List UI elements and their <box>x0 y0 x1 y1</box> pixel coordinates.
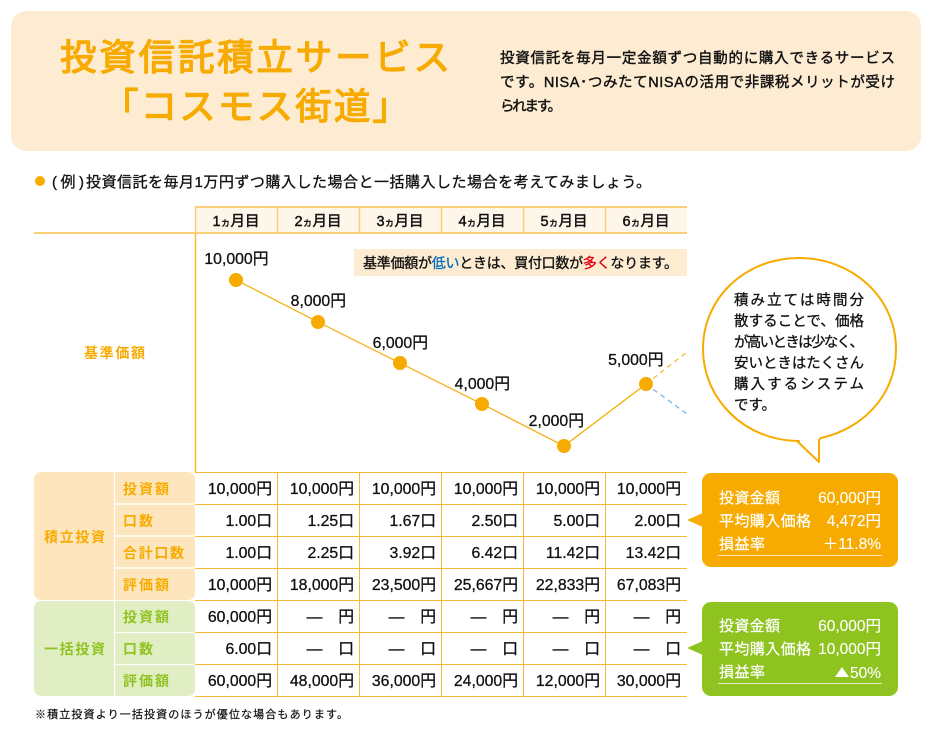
example heading: (例) <box>52 174 84 191</box>
table values: lump sum: ― 口 <box>634 641 681 658</box>
table header months: 3ヵ月目 <box>376 214 424 230</box>
table values: lump sum: ― 円 <box>634 609 681 626</box>
table values: tsumitate: 10,000円 <box>208 577 272 594</box>
note: low price buys more units: 基準価額が低いときは、買付口数が多くなります。 <box>363 255 678 271</box>
summary box: lump sum: 損益率 <box>719 664 765 681</box>
table values: lump sum <box>208 609 681 690</box>
table values: lump sum: ― 口 <box>307 641 354 658</box>
line chart: base price: 8,000円 <box>291 293 346 310</box>
table values: lump sum: 48,000円 <box>290 673 354 690</box>
table row labels: lump sum: 評価額 <box>123 673 169 689</box>
summary box: lump sum <box>687 602 898 696</box>
table values: lump sum: ― 口 <box>389 641 436 658</box>
table row labels: tsumitate <box>34 472 195 600</box>
row label: base price: 基準価額 <box>84 345 145 361</box>
description text: られます。 <box>500 98 562 115</box>
table row labels: tsumitate: 投資額 <box>123 481 169 497</box>
table values: tsumitate: 13.42口 <box>626 545 681 562</box>
table header months: 1ヵ月目 <box>212 214 260 230</box>
summary box: tsumitate <box>687 473 898 567</box>
table values: lump sum: 24,000円 <box>454 673 518 690</box>
table header months: 5ヵ月目 <box>540 214 588 230</box>
table header months: 4ヵ月目 <box>458 214 506 230</box>
table values: lump sum: 12,000円 <box>536 673 600 690</box>
table grid <box>195 472 687 697</box>
table values: lump sum: 36,000円 <box>372 673 436 690</box>
summary box: tsumitate: 投資金額 <box>719 490 780 507</box>
table row labels: lump sum <box>34 601 195 696</box>
table row labels: tsumitate: 積立投資 <box>44 529 105 545</box>
table row labels: tsumitate: 合計口数 <box>123 545 184 561</box>
title <box>60 37 450 127</box>
header panel <box>11 11 921 151</box>
summary box: tsumitate: 平均購入価格 <box>719 513 811 530</box>
table values: tsumitate: 18,000円 <box>290 577 354 594</box>
table row labels: lump sum: 一括投資 <box>44 641 105 657</box>
line chart: base price: 4,000円 <box>455 376 510 393</box>
table values: tsumitate: 1.00口 <box>225 513 272 530</box>
summary box: lump sum: 10,000円 <box>818 641 881 658</box>
line chart: base price: 5,000円 <box>608 352 664 369</box>
description text: 投資信託を毎月一定金額ずつ自動的に購入できるサービス <box>500 50 895 67</box>
table values: tsumitate: 10,000円 <box>536 481 600 498</box>
summary box: lump sum: 投資金額 <box>719 618 780 635</box>
table values: lump sum: 60,000円 <box>208 609 272 626</box>
table values: tsumitate: 2.00口 <box>634 513 681 530</box>
summary box: tsumitate: 60,000円 <box>818 490 881 507</box>
table values: tsumitate: 22,833円 <box>536 577 600 594</box>
table values: tsumitate: 1.25口 <box>307 513 354 530</box>
line chart: base price: 10,000円 <box>204 251 268 268</box>
table values: tsumitate: 10,000円 <box>208 481 272 498</box>
footnote: ※積立投資より一括投資のほうが優位な場合もあります。 <box>35 707 348 721</box>
table header months: 2ヵ月目 <box>294 214 342 230</box>
table values: tsumitate: 2.25口 <box>307 545 354 562</box>
table values: lump sum: 6.00口 <box>225 641 272 658</box>
table values: lump sum: ― 円 <box>389 609 436 626</box>
table values: tsumitate: 23,500円 <box>372 577 436 594</box>
description text <box>500 50 895 115</box>
line chart: base price <box>196 233 687 472</box>
table values: tsumitate: 10,000円 <box>617 481 681 498</box>
table values: tsumitate <box>208 481 681 594</box>
callout: time diversification: 積み立ては時間分 <box>734 292 864 309</box>
note: low price buys more units <box>354 249 687 276</box>
table row labels: lump sum: 投資額 <box>123 609 169 625</box>
table header months <box>34 206 687 233</box>
table values: lump sum: ― 口 <box>553 641 600 658</box>
table values: tsumitate: 1.67口 <box>389 513 436 530</box>
table row labels: lump sum: 口数 <box>123 641 153 657</box>
table header months: 6ヵ月目 <box>622 214 670 230</box>
table values: tsumitate: 2.50口 <box>471 513 518 530</box>
table values: lump sum: ― 円 <box>307 609 354 626</box>
table row labels: tsumitate: 口数 <box>123 513 153 529</box>
line chart: base price: 6,000円 <box>373 335 428 352</box>
callout: time diversification: 購入するシステム <box>734 376 864 393</box>
description text: です。NISA･つみたてNISAの活用で非課税メリットが受け <box>500 74 895 91</box>
title: 「コスモス街道」 <box>102 86 409 127</box>
table values: lump sum: ― 円 <box>471 609 518 626</box>
summary box: lump sum: 50% <box>850 665 881 682</box>
table values: lump sum: 30,000円 <box>617 673 681 690</box>
summary box: tsumitate: 損益率 <box>719 536 765 553</box>
summary box: tsumitate: 4,472円 <box>827 513 881 530</box>
callout: time diversification: が高いときは少なく、 <box>734 334 864 351</box>
table values: lump sum: 60,000円 <box>208 673 272 690</box>
table values: tsumitate: 5.00口 <box>553 513 600 530</box>
table values: tsumitate: 25,667円 <box>454 577 518 594</box>
table values: lump sum: ― 口 <box>471 641 518 658</box>
callout: time diversification: 安いときはたくさん <box>734 355 864 372</box>
line chart: base price: 2,000円 <box>529 413 584 430</box>
table values: tsumitate: 3.92口 <box>389 545 436 562</box>
summary box: lump sum: 平均購入価格 <box>719 641 811 658</box>
summary box: lump sum: 60,000円 <box>818 618 881 635</box>
title: 投資信託積立サービス <box>60 37 450 78</box>
summary box: tsumitate: ＋11.8% <box>823 536 881 553</box>
table values: tsumitate: 67,083円 <box>617 577 681 594</box>
table values: tsumitate: 11.42口 <box>546 545 600 562</box>
table values: tsumitate: 10,000円 <box>454 481 518 498</box>
table values: lump sum: ― 円 <box>553 609 600 626</box>
table values: tsumitate: 1.00口 <box>225 545 272 562</box>
callout: time diversification: 散することで、価格 <box>734 313 864 330</box>
table values: tsumitate: 6.42口 <box>471 545 518 562</box>
callout: time diversification <box>703 258 896 462</box>
callout: time diversification: です。 <box>734 397 776 414</box>
table values: tsumitate: 10,000円 <box>290 481 354 498</box>
table row labels: tsumitate: 評価額 <box>123 577 169 593</box>
table values: tsumitate: 10,000円 <box>372 481 436 498</box>
example heading: 投資信託を毎月1万円ずつ購入した場合と一括購入した場合を考えてみましょう。 <box>86 174 651 191</box>
